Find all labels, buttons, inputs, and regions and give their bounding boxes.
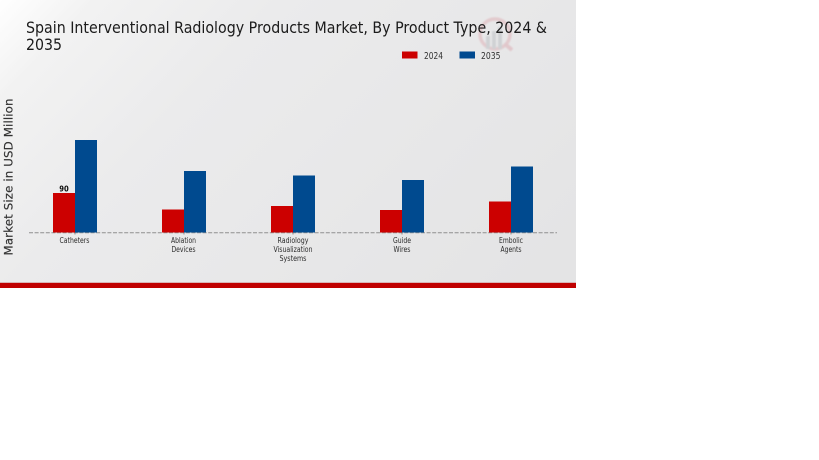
group: Radiology Visualization Systems: Systems <box>280 254 306 263</box>
group: Embolic Agents: Embolic <box>499 236 523 245</box>
group: Guide Wires <box>380 180 424 254</box>
group: Ablation Devices: Ablation <box>171 236 196 245</box>
panel: chart background <box>0 0 576 283</box>
group: Embolic Agents <box>489 166 533 254</box>
group: Guide Wires: Guide <box>393 236 411 245</box>
legend item: 2024: 2024 <box>424 51 443 62</box>
y axis label: Market Size in USD Million <box>2 98 16 256</box>
title <box>26 18 547 54</box>
group: Radiology Visualization Systems: Visualization <box>274 245 312 254</box>
group: Catheters: Catheters <box>60 236 90 245</box>
icon: watermark magnifier logo <box>480 19 512 50</box>
title: Spain Interventional Radiology Products Market, By Product Type, 2024 & <box>26 18 547 37</box>
baseline <box>29 232 557 234</box>
title: 2035 <box>26 35 62 54</box>
group: Guide Wires: Wires <box>394 245 410 254</box>
legend item: 2035: 2035 <box>481 51 501 62</box>
legend <box>402 51 501 62</box>
group: Radiology Visualization Systems: Radiology <box>278 236 309 245</box>
group: Catheters <box>53 140 97 245</box>
group: Radiology Visualization Systems <box>271 176 315 263</box>
group: Ablation Devices: Devices <box>172 245 196 254</box>
footer red band <box>0 282 576 288</box>
group: Embolic Agents: Agents <box>500 245 522 254</box>
group: Ablation Devices <box>162 171 206 254</box>
bar chart <box>29 140 557 263</box>
value label: 90 <box>59 184 69 194</box>
